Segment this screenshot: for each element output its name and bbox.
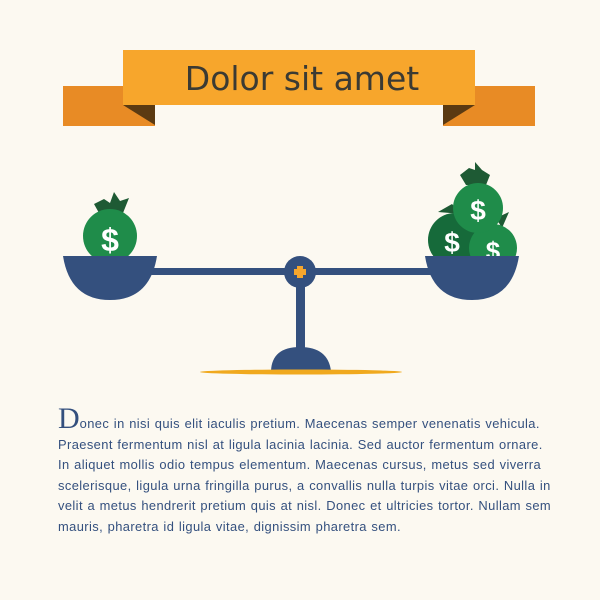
icon: right money bags: $: [486, 236, 501, 266]
body text: mauris, pharetra id ligula vitae, dignissim pharetra sem.: [58, 519, 401, 534]
banner: [63, 50, 535, 126]
icon: left money bag: $: [101, 222, 119, 258]
icon: right money bags: $: [470, 195, 486, 226]
body text: In aliquet mollis odio tempus elementum. Maecenas cursus, metus sed viverra: [58, 457, 541, 472]
illustration: [63, 50, 535, 374]
body text: [58, 402, 551, 534]
title: Dolor sit amet: [185, 59, 419, 98]
body text: Donec in nisi quis elit iaculis pretium. Maecenas semper venenatis vehicula.: [58, 402, 540, 435]
icon: right money bags: $: [444, 227, 460, 258]
body text: Praesent fermentum nisl at ligula lacinia lacinia. Sed auctor fermentum ornare.: [58, 437, 543, 452]
scale: [63, 256, 519, 374]
icon: right money bags: [428, 162, 517, 272]
body text: scelerisque, ligula urna fringilla purus, a convallis nulla turpis vitae orci. Nulla in: [58, 478, 551, 493]
icon: left money bag: [83, 192, 137, 263]
body text: velit a metus hendrerit pretium quis at nisl. Donec et ultricies tortor. Nullam sem: [58, 498, 551, 513]
